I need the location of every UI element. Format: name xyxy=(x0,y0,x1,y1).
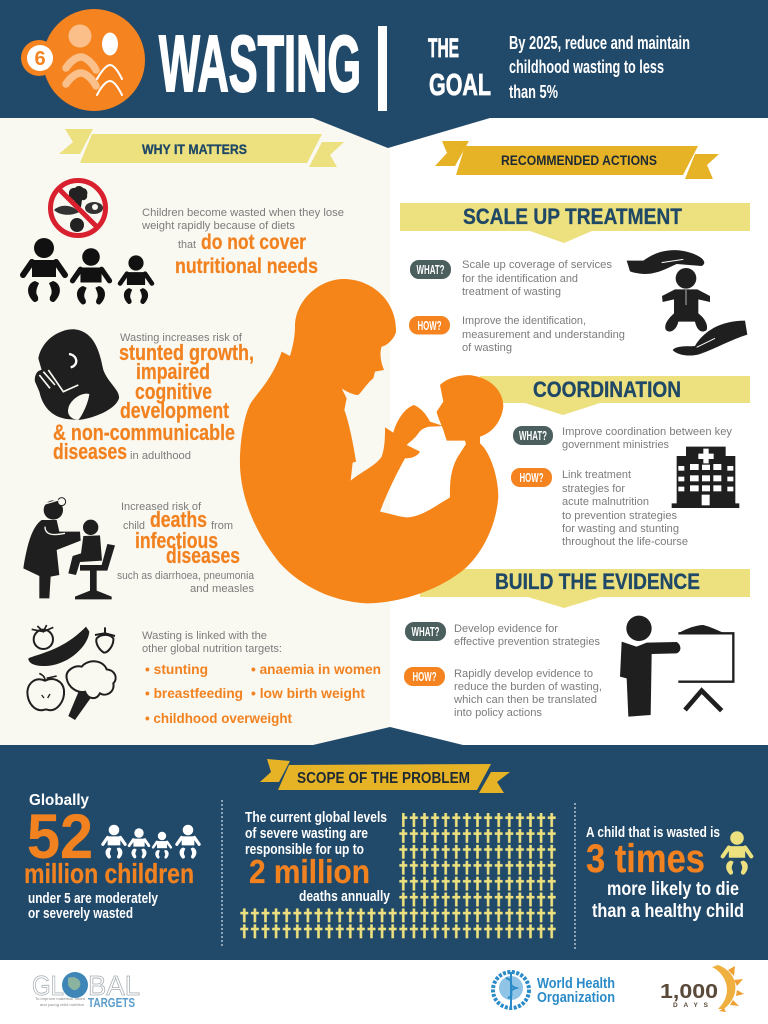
ribbon: recommended actions: RECOMMENDED ACTIONS xyxy=(501,153,657,168)
stat: 2 million deaths: responsible for up to xyxy=(245,841,364,858)
logo: 1000 days xyxy=(660,965,744,1012)
stat: 3 times xyxy=(586,824,744,922)
icon: hands protecting baby xyxy=(627,250,747,356)
band: scale up treatment xyxy=(400,203,750,243)
stat: 52 million children xyxy=(24,792,194,922)
band: coordination: COORDINATION xyxy=(533,377,681,402)
text: why wasted: Children become wasted when they lose xyxy=(142,207,344,219)
logo: global targets: TARGETS xyxy=(88,996,135,1010)
band: build the evidence xyxy=(420,569,750,608)
icon: three babies xyxy=(23,238,152,305)
text: deaths risk: and measles xyxy=(190,583,254,595)
text: how, coordination: for wasting and stunting xyxy=(562,523,679,535)
text: what, coordination: Improve coordination between key xyxy=(562,426,732,438)
pill: what, scale up xyxy=(410,260,451,279)
heading: the goal: GOAL xyxy=(429,67,491,102)
pill: what, evidence xyxy=(405,622,446,641)
stat: 2 million deaths: 2 million xyxy=(249,853,370,890)
heading: the goal: THE xyxy=(428,33,459,63)
goal statement: than 5% xyxy=(509,81,558,102)
goal statement: childhood wasting to less xyxy=(509,56,664,77)
stat: 52 million children: 52 xyxy=(27,802,93,872)
text: how, scale up: Improve the identification, xyxy=(462,315,586,327)
text: deaths risk xyxy=(117,501,255,595)
header banner xyxy=(0,0,768,148)
text: stunted growth risk xyxy=(53,332,254,464)
logo: global targets: To improve maternal, infant xyxy=(35,996,86,1001)
pill: how, coordination xyxy=(511,468,552,487)
badge: goal 6 icon xyxy=(21,9,145,111)
text: stunted growth risk: cognitive xyxy=(135,379,212,404)
text: how, coordination xyxy=(562,469,688,548)
logo: global targets xyxy=(32,970,140,1010)
text: nutrition targets: • anaemia in women xyxy=(251,661,381,677)
text: stunted growth risk: & non-communicable xyxy=(53,420,235,445)
title divider bar xyxy=(378,26,387,111)
badge: goal 6 icon: 6 xyxy=(34,48,46,70)
stat: 52 million children: under 5 are moderately xyxy=(28,890,159,907)
text: how, evidence xyxy=(453,668,602,719)
ribbon: scope of the problem: SCOPE OF THE PROBLEM xyxy=(297,770,470,787)
logo: global targets: and young child nutrition xyxy=(40,1002,84,1007)
text: what, coordination: government ministries xyxy=(562,439,669,451)
logo: world health organization xyxy=(493,972,615,1008)
stat: 52 million children: Globally xyxy=(29,792,89,809)
text: why wasted: weight rapidly because of diets xyxy=(141,220,295,232)
band: build the evidence: BUILD THE EVIDENCE xyxy=(495,569,700,594)
text: deaths risk: such as diarrhoea, pneumonia xyxy=(117,570,255,582)
stat: 52 million children: million children xyxy=(24,858,194,889)
text: deaths risk: deaths xyxy=(150,507,207,532)
pill: what, coordination xyxy=(513,426,553,445)
pill: how, scale up xyxy=(409,316,450,334)
text: deaths risk: Increased risk of xyxy=(121,501,202,513)
logo: world health organization: World Health xyxy=(537,976,615,992)
logo: global targets: BAL xyxy=(88,970,140,1001)
text: what, evidence: Develop evidence for xyxy=(454,623,558,635)
pill: how, coordination: HOW? xyxy=(520,471,544,485)
title: WASTING xyxy=(159,19,361,108)
pill: how, scale up: HOW? xyxy=(418,319,442,333)
icon: four white babies xyxy=(103,825,199,859)
text: how, scale up: of wasting xyxy=(462,342,512,354)
heading: the goal xyxy=(428,33,491,102)
ribbon: recommended actions xyxy=(435,141,719,179)
text: what, scale up: treatment of wasting xyxy=(462,286,561,298)
stat: 2 million deaths: The current global levels xyxy=(245,809,387,826)
pill: what, evidence: WHAT? xyxy=(412,625,440,639)
pill: how, evidence: HOW? xyxy=(412,670,436,684)
stat: 2 million deaths: deaths annually xyxy=(299,888,391,905)
stat: 52 million children: or severely wasted xyxy=(28,905,133,922)
text: deaths risk: diseases xyxy=(166,543,240,568)
ribbon: scope of the problem xyxy=(260,759,510,793)
text: why wasted: that xyxy=(178,239,197,251)
text: how, evidence: Rapidly develop evidence to xyxy=(454,668,593,680)
text: how, scale up xyxy=(462,315,625,354)
chart: crosses representing deaths xyxy=(239,813,558,940)
text: why wasted: nutritional needs xyxy=(175,255,318,278)
band: coordination xyxy=(480,376,750,415)
pill: what, scale up: WHAT? xyxy=(416,263,444,277)
goal statement xyxy=(509,32,690,102)
goal statement: By 2025, reduce and maintain xyxy=(509,32,690,53)
ribbon: why it matters: WHY IT MATTERS xyxy=(142,142,247,157)
logo: global targets: GL xyxy=(32,970,64,1001)
text: what, scale up: Scale up coverage of services xyxy=(462,259,612,271)
text: nutrition targets: • breastfeeding xyxy=(145,685,243,701)
stat: 3 times: 3 times xyxy=(586,837,705,881)
text: stunted growth risk: diseases xyxy=(53,439,127,464)
icon: yellow baby xyxy=(723,831,751,875)
icon: hospital xyxy=(672,447,739,508)
text: nutrition targets: • stunting xyxy=(145,661,208,677)
stat: 3 times: than a healthy child xyxy=(592,901,744,922)
ribbon: why it matters xyxy=(59,129,344,167)
icon: worried woman head xyxy=(35,329,119,420)
text: stunted growth risk: development xyxy=(120,398,230,423)
text: nutrition targets: Wasting is linked with the xyxy=(142,630,267,642)
text: stunted growth risk: stunted growth, xyxy=(119,340,254,365)
central silhouette: mother feeding child xyxy=(240,279,503,603)
icon: no food sign xyxy=(50,180,106,236)
text: what, coordination xyxy=(562,426,732,451)
text: how, evidence: reduce the burden of wasting, xyxy=(454,681,602,693)
stat: 2 million deaths xyxy=(245,809,391,905)
text: nutrition targets: • low birth weight xyxy=(251,685,365,701)
icon: fruit and vegetables xyxy=(27,625,116,720)
text: stunted growth risk: impaired xyxy=(136,359,210,384)
pill: what, coordination: WHAT? xyxy=(519,429,547,443)
icon: presenter at board xyxy=(620,616,733,717)
logo: 1000 days: 1,000 xyxy=(660,981,718,1003)
text: stunted growth risk: Wasting increases risk of xyxy=(120,332,243,344)
icon: doctor and child xyxy=(23,498,115,599)
text: how, coordination: throughout the life-course xyxy=(562,536,688,548)
logo: 1000 days: DAYS xyxy=(673,1002,709,1009)
text: deaths risk: infectious xyxy=(135,528,218,553)
logo: world health organization: Organization xyxy=(537,990,615,1006)
page background: cream left panel xyxy=(0,118,390,748)
text: deaths risk: child xyxy=(123,520,145,532)
text: stunted growth risk: in adulthood xyxy=(130,450,191,462)
stat: 3 times: A child that is wasted is xyxy=(586,824,720,841)
text: why wasted: do not cover xyxy=(201,231,306,254)
text: how, coordination: Link treatment xyxy=(562,469,632,481)
text: how, coordination: strategies for xyxy=(562,483,625,495)
text: how, evidence: which can then be translated xyxy=(453,694,597,706)
text: how, coordination: acute malnutrition xyxy=(562,496,649,508)
text: how, scale up: measurement and understanding xyxy=(462,329,625,341)
text: nutrition targets: • childhood overweight xyxy=(145,710,292,726)
text: what, scale up xyxy=(462,259,612,298)
text: nutrition targets: other global nutrition targets: xyxy=(142,643,282,655)
band: scale up treatment: SCALE UP TREATMENT xyxy=(463,204,682,229)
text: nutrition targets xyxy=(142,630,381,726)
text: what, scale up: for the identification and xyxy=(462,273,578,285)
pill: how, evidence xyxy=(404,667,445,686)
text: how, coordination: to prevention strategies xyxy=(562,510,677,522)
stat: 3 times: more likely to die xyxy=(607,879,739,900)
stat: 2 million deaths: of severe wasting are xyxy=(245,825,368,842)
text: what, evidence xyxy=(454,623,600,648)
text: deaths risk: from xyxy=(211,520,233,532)
text: what, evidence: effective prevention strategies xyxy=(454,636,600,648)
bottom banner background xyxy=(0,727,768,960)
text: why wasted xyxy=(141,207,344,278)
text: how, evidence: into policy actions xyxy=(454,707,542,719)
